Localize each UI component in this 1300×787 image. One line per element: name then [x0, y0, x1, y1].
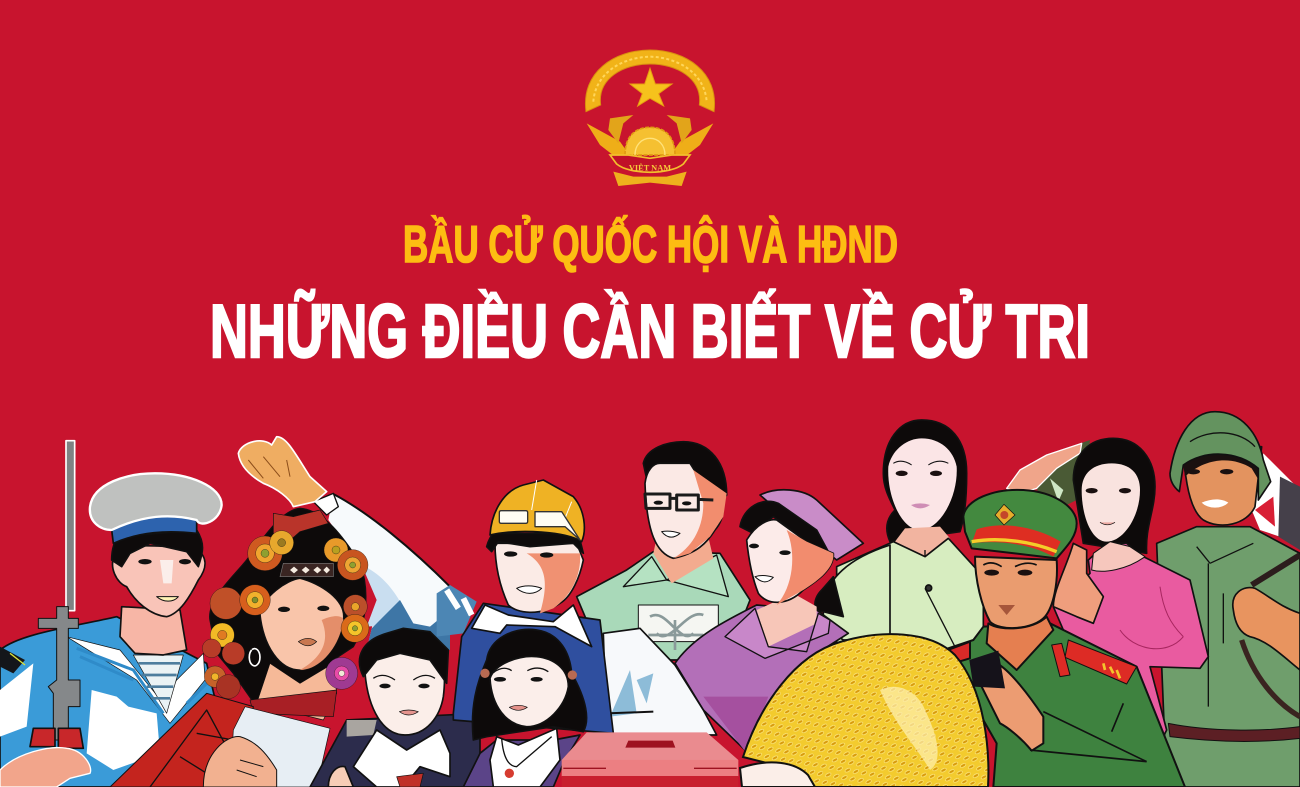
figure: construction worker in yellow helmet [437, 480, 613, 733]
figure: raised arm with white sleeve [238, 437, 450, 650]
hand under rice sheaf [740, 762, 815, 787]
figure: woman in pink blouse [1007, 438, 1208, 743]
figure: young pioneer girl [463, 629, 587, 787]
ribbon [610, 155, 690, 172]
star [630, 68, 672, 106]
figure: engineer with glasses [577, 442, 750, 660]
figure: white sleeve behind ballot box [603, 628, 717, 735]
figure: woman in purple blouse with headscarf [675, 490, 890, 753]
cogwheel [625, 127, 675, 155]
heading: election subtitle: BẦU CỬ QUỐC HỘI VÀ HĐND [403, 215, 898, 274]
figure: ethnic minority woman with flower headdress [110, 508, 369, 787]
figure: sailor with rifle [0, 441, 222, 787]
figure: golden rice sheaf [740, 634, 988, 787]
icon: red ballot box [562, 732, 738, 787]
figure: woman in light green ao dai [837, 420, 983, 653]
figure: young pioneer boy [310, 628, 480, 787]
figure: soldier in pith helmet [1157, 412, 1300, 787]
icon: national emblem of Vietnam: VIỆT NAM [629, 164, 671, 173]
icon: national emblem of Vietnam [585, 50, 715, 186]
figure: police officer in green cap [943, 490, 1185, 787]
